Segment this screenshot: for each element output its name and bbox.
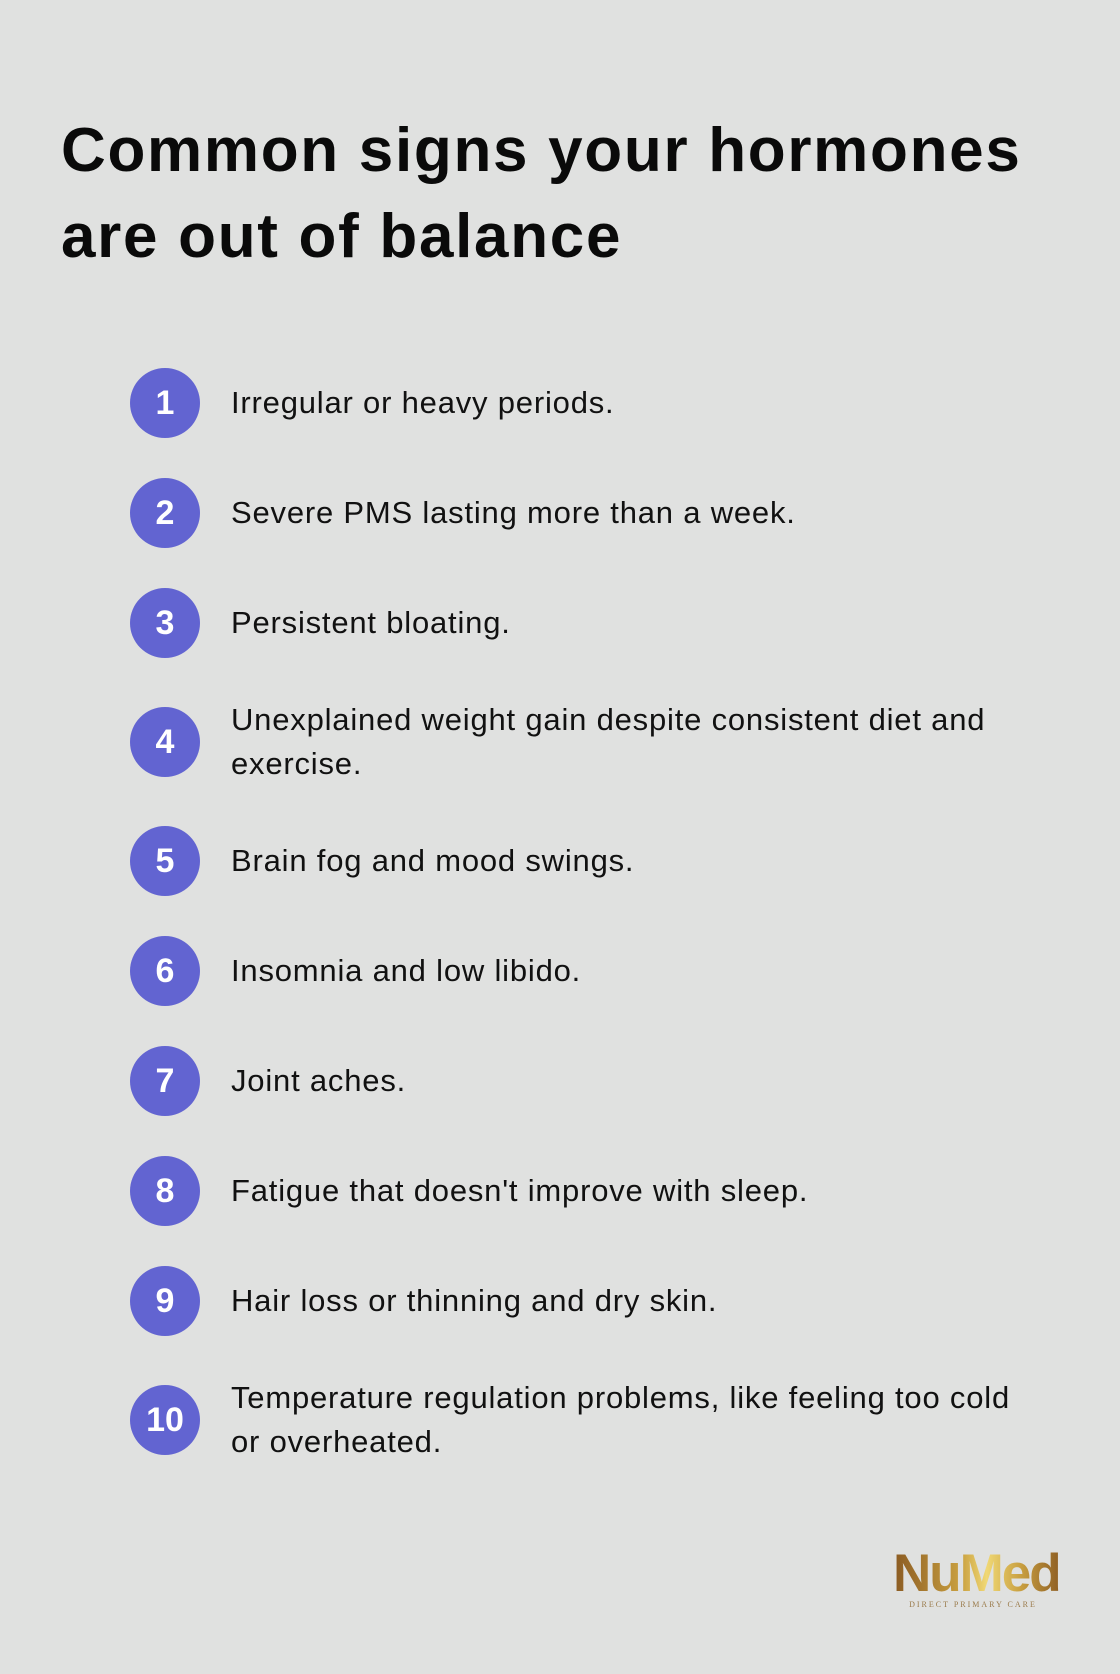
item 2: 2 (156, 494, 174, 532)
item 9: 9 (156, 1282, 174, 1320)
item 10: Temperature regulation problems, like feeling too cold (231, 1380, 1010, 1415)
item 1: 1 (156, 384, 174, 422)
item 2 (130, 478, 796, 548)
item 3: 3 (156, 604, 174, 642)
item 8 (130, 1156, 808, 1226)
item 5 (130, 826, 634, 896)
item 1 (130, 368, 614, 438)
title (61, 116, 1022, 271)
item 6 (130, 936, 581, 1006)
item 10: 10 (146, 1401, 184, 1439)
item 9: Hair loss or thinning and dry skin. (231, 1283, 717, 1318)
logo: DIRECT PRIMARY CARE (909, 1600, 1037, 1609)
item 5: Brain fog and mood swings. (231, 843, 634, 878)
item 9 (130, 1266, 717, 1336)
item 6: Insomnia and low libido. (231, 953, 581, 988)
item 2: Severe PMS lasting more than a week. (231, 495, 796, 530)
item 7: Joint aches. (231, 1063, 406, 1098)
item 3: Persistent bloating. (231, 605, 511, 640)
item 1: Irregular or heavy periods. (231, 385, 614, 420)
item 4: 4 (156, 723, 174, 761)
item 7 (130, 1046, 406, 1116)
item 4: Unexplained weight gain despite consistent diet and exercise. (231, 702, 985, 781)
item 10 (130, 1380, 1010, 1459)
item 10: or overheated. (231, 1424, 442, 1459)
title: are out of balance (61, 202, 622, 271)
item 3 (130, 588, 511, 658)
item 7: 7 (156, 1062, 174, 1100)
item 8: 8 (156, 1172, 174, 1210)
title: Common signs your hormones (61, 116, 1022, 185)
item 6: 6 (156, 952, 174, 990)
item 5: 5 (156, 842, 174, 880)
logo: NuMed (893, 1544, 1060, 1603)
item 8: Fatigue that doesn't improve with sleep. (231, 1173, 808, 1208)
